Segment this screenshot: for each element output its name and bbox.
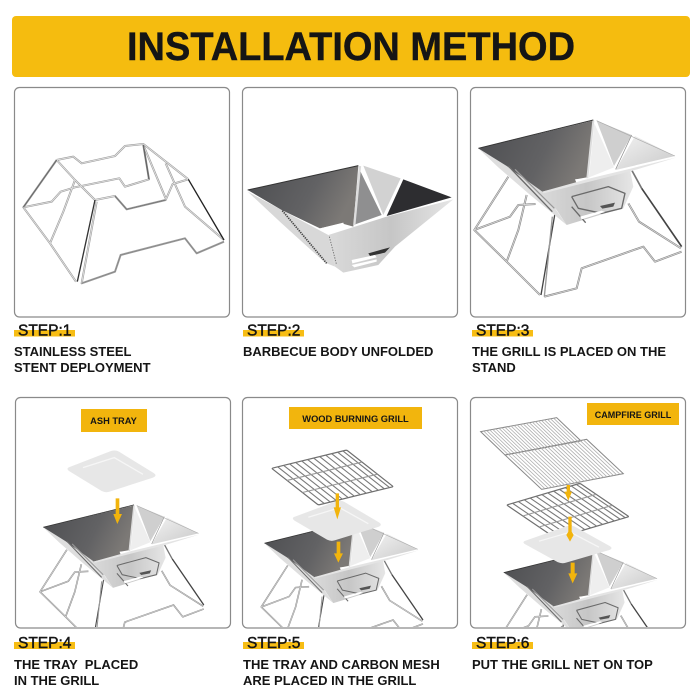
arrow upper [334,493,341,519]
panel: step 4 ash tray [16,398,230,644]
tray plate [293,501,381,541]
step 5 caption: ARE PLACED IN THE GRILL [243,673,416,688]
wire rack [272,450,393,505]
title: INSTALLATION METHOD [127,25,575,69]
panel: step 6 campfire grill [470,396,686,629]
arrow [113,498,122,524]
step 3 caption [472,322,666,375]
label: ash tray: ASH TRAY [90,416,138,426]
step 1 caption: STENT DEPLOYMENT [14,360,151,375]
step 1 caption: STEP:1 [18,322,71,340]
step 5 caption: STEP:5 [247,635,300,652]
illustration: folding wire stand [23,144,224,283]
arrow middle [566,517,574,542]
label: wood burning grill [289,407,422,429]
panel: step 5 wood burning grill [242,396,458,629]
wire rack [507,483,629,538]
step 6 caption: PUT THE GRILL NET ON TOP [472,657,653,672]
step 3 caption: THE GRILL IS PLACED ON THE [472,344,666,359]
tray plate [523,526,611,563]
ash tray plate [67,450,155,492]
illustration: mesh and tray over grill [261,450,423,659]
fine net back half [481,418,581,455]
step 6 caption [472,635,653,672]
step 4 caption [14,635,138,688]
step 1 caption [14,322,151,375]
fine net front half [505,439,623,489]
label: ash tray [81,409,147,432]
step 5 caption [243,635,440,688]
step 2 caption: STEP:2 [247,322,300,340]
step 4 caption: THE TRAY PLACED [14,657,138,672]
panel: step 2 barbecue body [242,88,458,317]
step 5 caption: THE TRAY AND CARBON MESH [243,657,440,672]
illustration: tray over grill [40,450,204,644]
step 1 caption: STAINLESS STEEL [14,344,132,359]
title banner [12,16,690,77]
panel: step 1 stainless steel stand [14,88,230,317]
illustration: grill net, mesh and tray over grill [480,417,658,627]
arrow bottom [568,563,577,583]
step 4 caption: STEP:4 [18,635,72,652]
step 4 caption: IN THE GRILL [14,673,99,688]
step 3 caption: STAND [472,360,516,375]
panel: step 3 grill on stand [470,88,686,317]
arrow lower [334,542,343,563]
step 3 caption: STEP:3 [476,322,529,340]
illustration: unfolded barbecue body [248,166,453,273]
label: campfire grill: CAMPFIRE GRILL [595,410,672,420]
label: campfire grill [587,403,679,425]
illustration: grill on stand [474,120,682,297]
step 6 caption: STEP:6 [476,635,529,652]
arrow top [564,485,572,501]
step 2 caption: BARBECUE BODY UNFOLDED [243,344,433,359]
label: wood burning grill: WOOD BURNING GRILL [302,414,409,424]
step 2 caption [243,322,433,359]
